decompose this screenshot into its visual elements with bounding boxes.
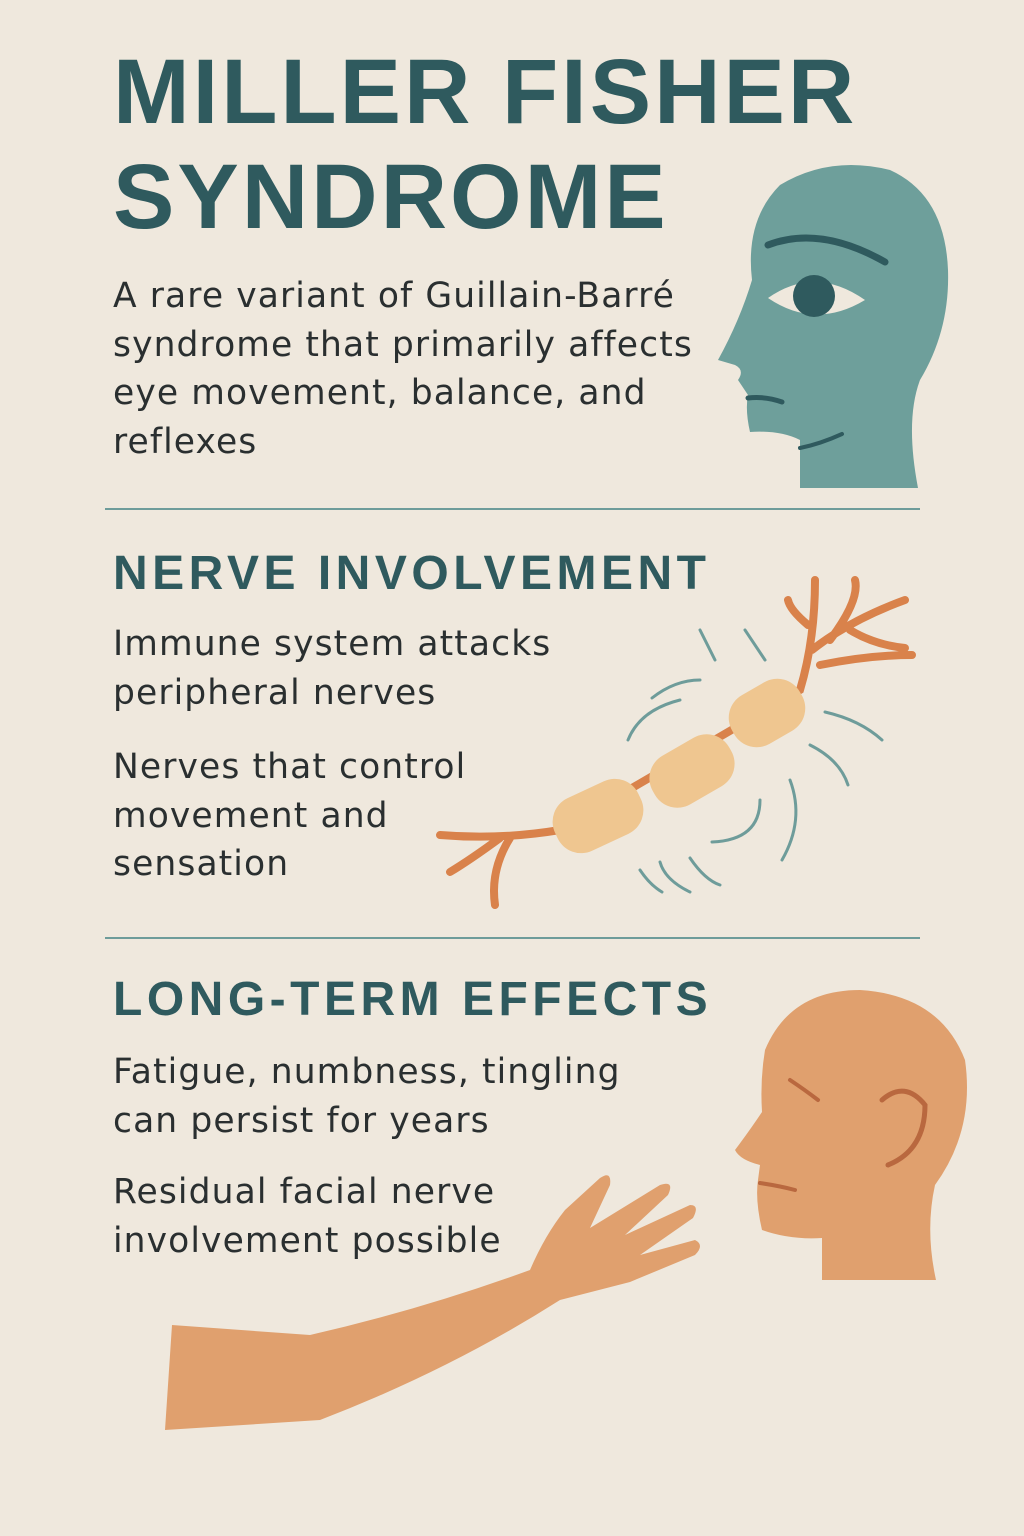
- icon: orange head: [735, 990, 967, 1280]
- title: MILLER FISHER: [113, 41, 857, 143]
- nerve text 1: Immune system attacks: [113, 624, 551, 664]
- nerve text 2: sensation: [113, 844, 289, 884]
- effects text 1: Fatigue, numbness, tingling: [113, 1052, 621, 1092]
- heading: long-term effects: LONG-TERM EFFECTS: [113, 973, 712, 1026]
- effects text 1: can persist for years: [113, 1100, 490, 1140]
- icon: nerve with myelin: [440, 580, 912, 905]
- effects text 1: [113, 1052, 621, 1140]
- nerve text 2: Nerves that control: [113, 747, 466, 787]
- title: SYNDROME: [113, 146, 669, 248]
- nerve text 1: [113, 624, 551, 712]
- intro text: [113, 276, 693, 462]
- intro text: reflexes: [113, 422, 257, 462]
- icon: teal head with eye: [718, 165, 948, 488]
- intro text: A rare variant of Guillain-Barré: [113, 276, 675, 316]
- intro text: eye movement, balance, and: [113, 373, 647, 413]
- icon: arm and hand: [165, 1175, 700, 1430]
- nerve text 1: peripheral nerves: [113, 672, 436, 712]
- intro text: syndrome that primarily affects: [113, 324, 693, 364]
- effects text 2: Residual facial nerve: [113, 1172, 495, 1212]
- effects text 2: involvement possible: [113, 1220, 502, 1260]
- title: [113, 41, 857, 248]
- nerve text 2: [113, 747, 466, 884]
- effects text 2: [113, 1172, 502, 1260]
- nerve text 2: movement and: [113, 796, 389, 836]
- heading: nerve involvement: NERVE INVOLVEMENT: [113, 547, 710, 600]
